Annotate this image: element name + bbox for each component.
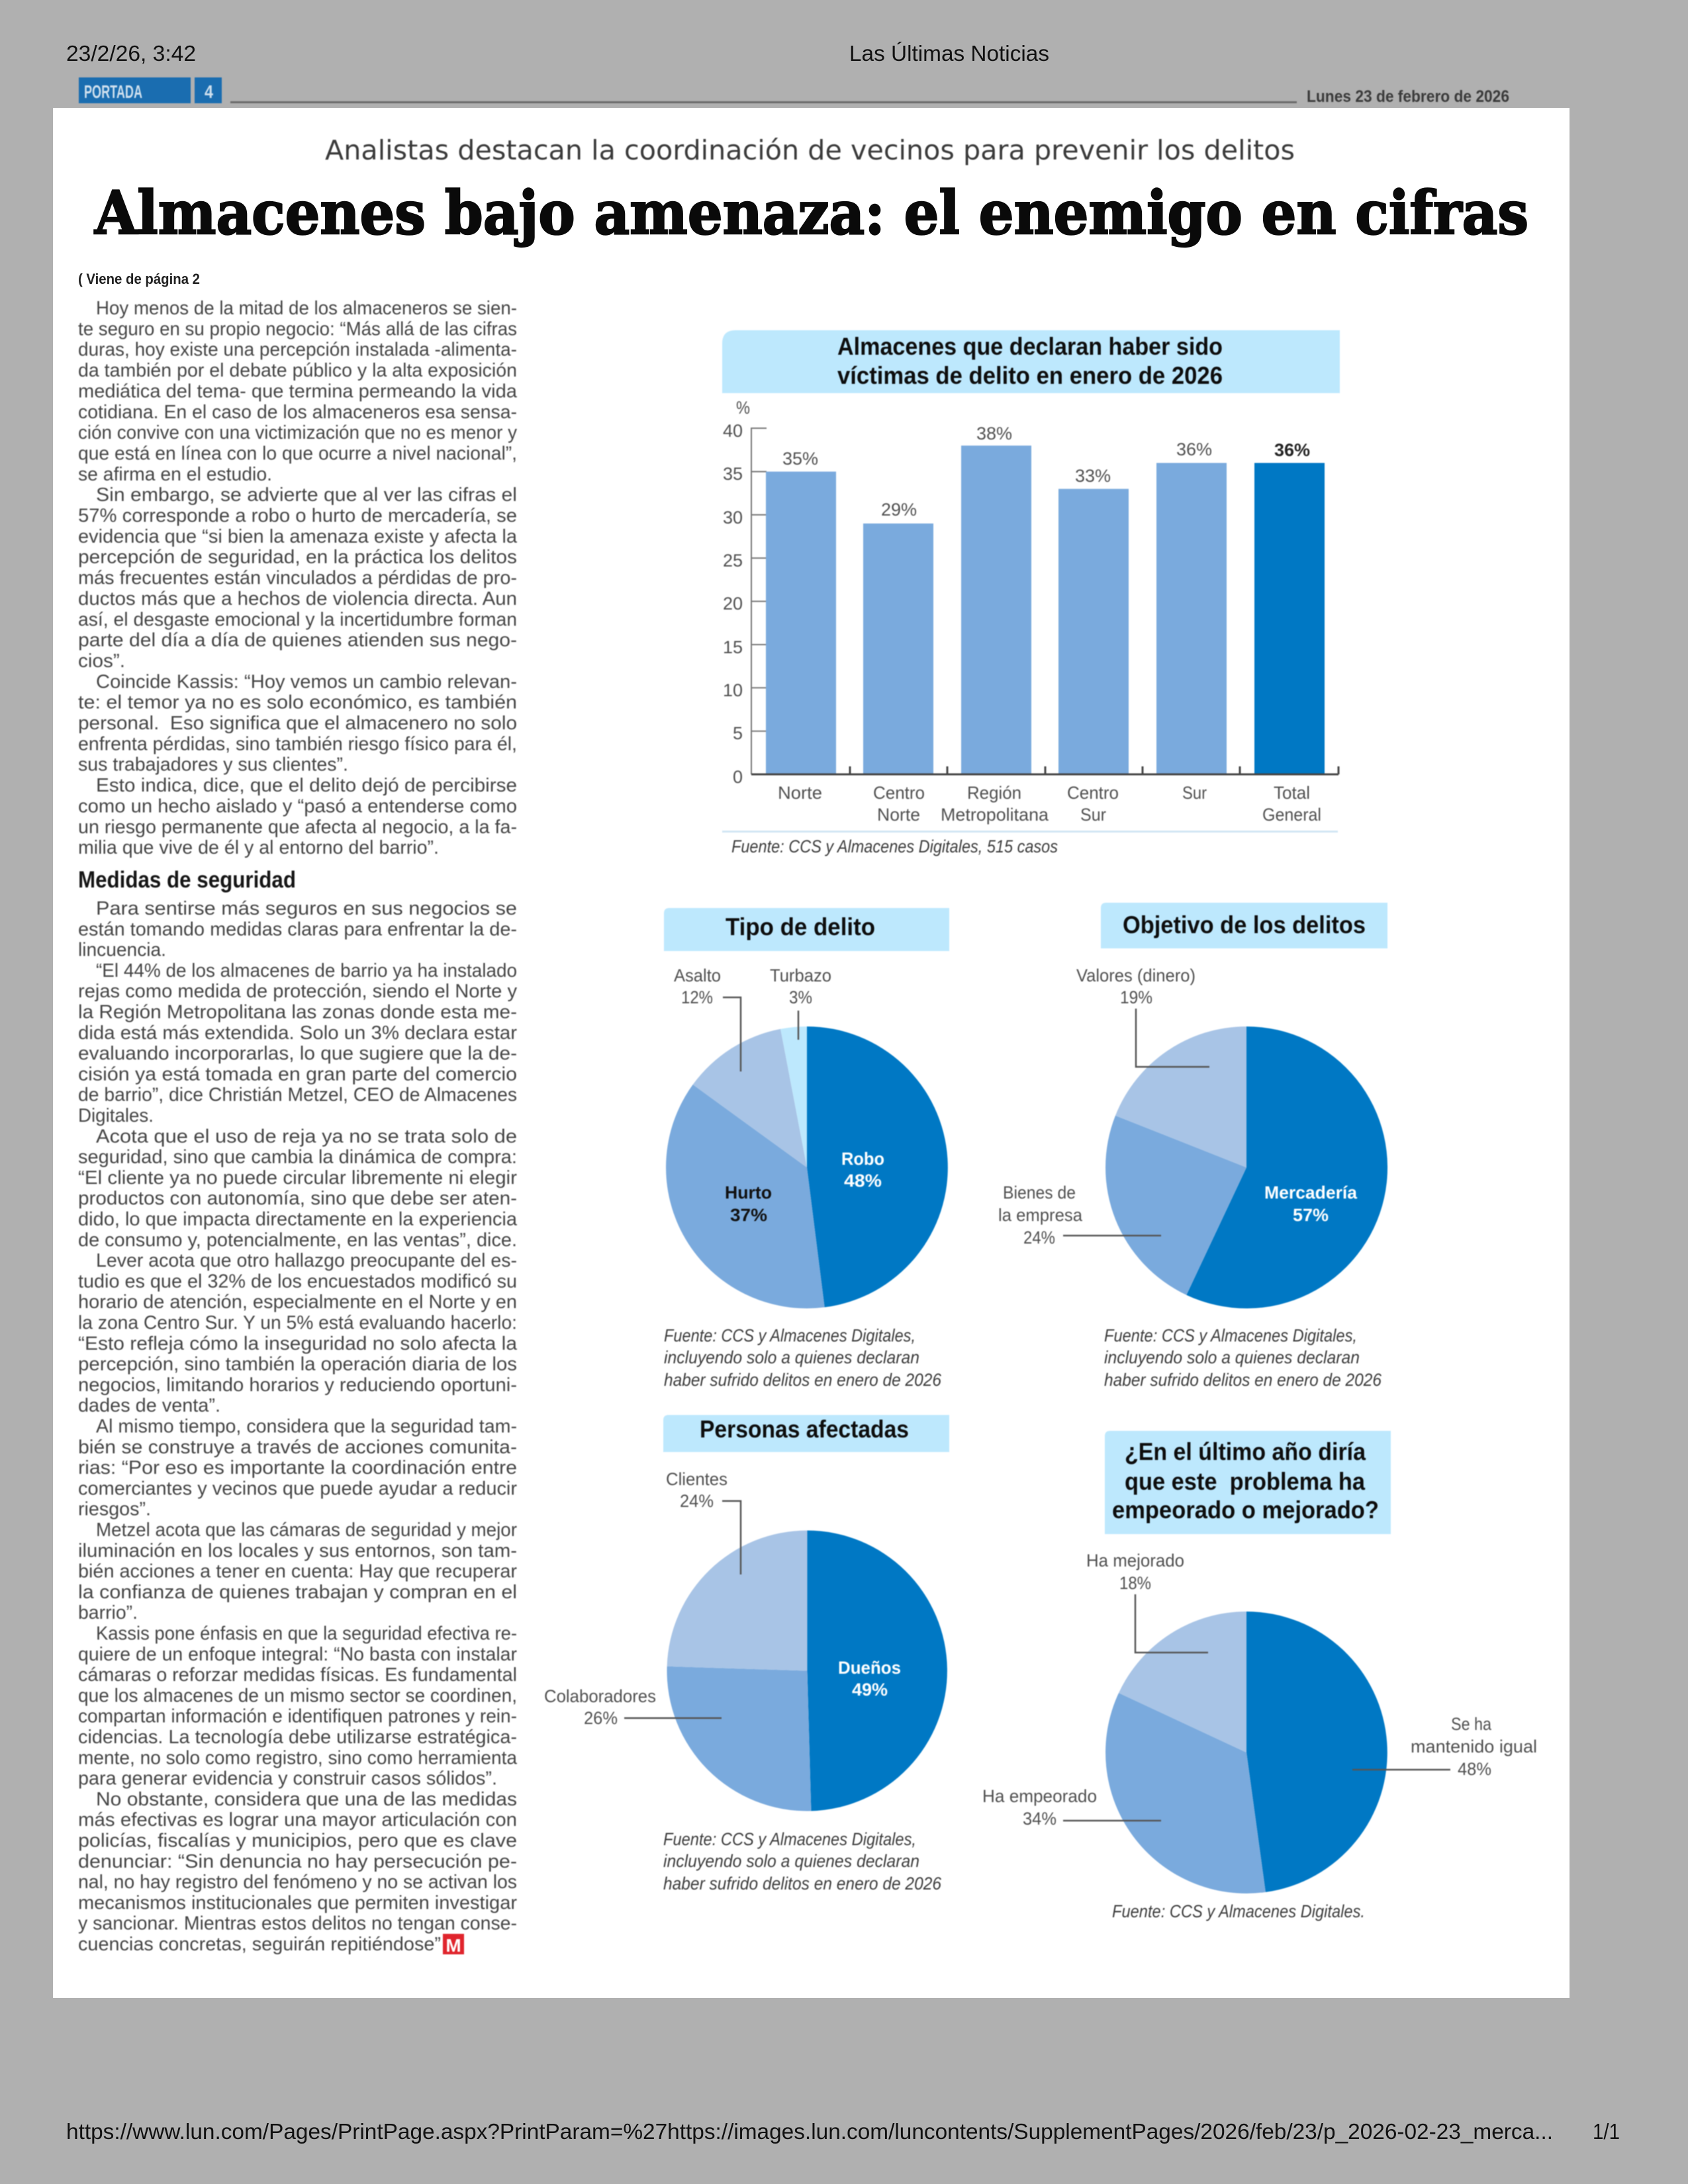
paragraph: denuncia: No obstante, considera que una de las medidas bbox=[96, 1789, 517, 1810]
label: valores: 19% bbox=[1120, 987, 1152, 1007]
bar value labels: 38% bbox=[976, 424, 1012, 443]
source note: Fuente: CCS y Almacenes Digitales, bbox=[663, 1829, 916, 1849]
paragraph: denuncia bbox=[78, 1789, 518, 1955]
category labels: Centro bbox=[1067, 783, 1119, 803]
source note: incluyendo solo a quienes declaran bbox=[1104, 1347, 1360, 1367]
y axis with labels: 0 bbox=[733, 767, 743, 787]
paragraph: rejas bbox=[78, 960, 518, 1126]
paragraph: sin embargo: más frecuentes están vinculados a pérdidas de pro- bbox=[78, 568, 517, 589]
label: dueños: 49% bbox=[852, 1680, 888, 1700]
paragraph: denuncia: denunciar: “Sin denuncia no hay persecución pe- bbox=[78, 1851, 517, 1872]
paragraph: rejas: Digitales. bbox=[78, 1105, 154, 1126]
paragraph: rejas: la Región Metropolitana las zonas donde esta me- bbox=[78, 1002, 517, 1023]
label: hurto: 37% bbox=[730, 1205, 767, 1225]
paragraph: Kassis: personal. Eso significa que el almacenero no solo bbox=[78, 713, 517, 734]
bars bbox=[766, 445, 1325, 774]
paragraph: denuncia: más efectivas es lograr una mayor articulación con bbox=[78, 1809, 517, 1831]
paragraph: rejas: “El 44% de los almacenes de barrio ya ha instalado bbox=[96, 960, 517, 981]
continuation note: ( Viene de página 2 bbox=[78, 271, 200, 287]
label: se ha mantenido igual bbox=[1352, 1714, 1537, 1779]
paragraph: Kassis: Coincide Kassis: “Hoy vemos un cambio relevan- bbox=[96, 671, 517, 692]
source note: Fuente: CCS y Almacenes Digitales. bbox=[1112, 1901, 1365, 1921]
bar value labels: 35% bbox=[782, 449, 818, 469]
bar value labels: 36% bbox=[1274, 440, 1310, 460]
paragraph: acciones comunitarias: comerciantes y vecinos que puede ayudar a reducir bbox=[78, 1478, 518, 1499]
category labels: Región bbox=[967, 783, 1021, 803]
newspaper section strip: PORTADA bbox=[84, 81, 142, 102]
pie chart: evolución bbox=[1105, 1612, 1387, 1893]
paragraph: percepción: ción convive con una victimización que no es menor y bbox=[78, 422, 518, 443]
label: clientes: 24% bbox=[680, 1491, 714, 1511]
paragraph: esto indica: como un hecho aislado y “pasó a entenderse como bbox=[78, 796, 517, 817]
paragraph: acota: “El cliente ya no puede circular libremente ni elegir bbox=[78, 1167, 518, 1189]
paragraph: esto indica: milia que vive de él y al entorno del barrio”. bbox=[78, 837, 439, 858]
newspaper section strip: 4 bbox=[205, 81, 213, 102]
paragraph: enfoque integral: compartan información e identifiquen patrones y rein- bbox=[78, 1706, 517, 1727]
paragraph: rejas: evaluando incorporarlas, lo que sugiere que la de- bbox=[78, 1043, 517, 1064]
paragraph: percepción: cotidiana. En el caso de los almaceneros esa sensa- bbox=[78, 402, 517, 423]
paragraph: acciones comunitarias bbox=[78, 1416, 518, 1520]
newspaper section strip bbox=[79, 77, 1509, 106]
source note: incluyendo solo a quienes declaran bbox=[664, 1347, 919, 1367]
browser print header bbox=[66, 41, 1049, 66]
y axis with labels: 25 bbox=[723, 551, 743, 570]
paragraph: acciones comunitarias: Al mismo tiempo, considera que la seguridad tam- bbox=[96, 1416, 517, 1437]
category labels: Sur bbox=[1182, 783, 1207, 803]
y axis with labels: 20 bbox=[723, 594, 743, 614]
label: mercadería: Mercadería bbox=[1264, 1183, 1358, 1203]
subheading: medidas de seguridad: Medidas de seguridad bbox=[78, 867, 296, 893]
y axis with labels: 15 bbox=[723, 637, 743, 657]
paragraph: enfoque integral: cámaras o reforzar medidas físicas. Es fundamental bbox=[78, 1664, 517, 1686]
y axis with labels: 5 bbox=[733, 723, 743, 743]
paragraph: percepción bbox=[78, 298, 518, 485]
paragraph: metzel cámaras bbox=[78, 1520, 518, 1623]
heading: personas afectadas bbox=[663, 1415, 949, 1452]
paragraph: percepción: se afirma en el estudio. bbox=[78, 464, 272, 485]
paragraph: denuncia: y sancionar. Mientras estos delitos no tengan conse- bbox=[78, 1913, 517, 1934]
heading: objetivo: Objetivo de los delitos bbox=[1123, 911, 1366, 938]
paragraph: sin embargo: evidencia que “si bien la amenaza existe y afecta la bbox=[78, 526, 517, 547]
label: robo: 48% bbox=[844, 1171, 882, 1191]
label: bienes de la empresa: 24% bbox=[1023, 1228, 1055, 1248]
y axis with labels: 35 bbox=[723, 464, 743, 484]
y axis with labels: 10 bbox=[723, 680, 743, 700]
heading: bar chart: víctimas de delito en enero de 2026 bbox=[837, 362, 1223, 389]
label: dueños: Dueños bbox=[838, 1658, 901, 1678]
category labels: Centro bbox=[873, 783, 925, 803]
label: turbazo: Turbazo bbox=[770, 966, 831, 985]
paragraph: rejas: de barrio”, dice Christián Metzel, CEO de Almacenes bbox=[78, 1085, 517, 1106]
paragraph: esto indica: un riesgo permanente que afecta al negocio, a la fa- bbox=[78, 817, 517, 838]
heading: bar chart bbox=[722, 330, 1340, 393]
x axis baseline bbox=[751, 766, 1338, 774]
paragraph: denuncia: policías, fiscalías y municipios, pero que es clave bbox=[78, 1831, 517, 1852]
label: se ha mantenido igual: 48% bbox=[1458, 1759, 1491, 1779]
paragraph: acota: seguridad, sino que cambia la dinámica de compra: bbox=[78, 1147, 517, 1168]
paragraph: enfoque integral: quiere de un enfoque integral: “No basta con instalar bbox=[78, 1644, 517, 1665]
source note bbox=[1104, 1326, 1382, 1390]
label: asalto: Asalto bbox=[674, 966, 721, 985]
label: mercadería bbox=[1264, 1183, 1358, 1225]
paragraph: enfoque integral bbox=[78, 1623, 517, 1790]
paragraph: percepción: te seguro en su propio negocio: “Más allá de las cifras bbox=[78, 318, 517, 340]
paragraph: acota: dido, lo que impacta directamente en la experiencia bbox=[78, 1208, 517, 1230]
newspaper section strip: Lunes 23 de febrero de 2026 bbox=[1307, 87, 1509, 106]
category labels: Sur bbox=[1080, 805, 1106, 825]
label: se ha mantenido igual: Se ha bbox=[1451, 1714, 1492, 1734]
title: Almacenes bajo amenaza: el enemigo en cifras bbox=[94, 178, 1528, 248]
paragraph: sin embargo: así, el desgaste emocional y la incertidumbre forman bbox=[78, 609, 517, 630]
source note: Fuente: CCS y Almacenes Digitales, bbox=[1104, 1326, 1357, 1345]
paragraph: para sentirse: están tomando medidas claras para enfrentar la de- bbox=[78, 919, 517, 940]
paragraph: acota: productos con autonomía, sino que debe ser aten- bbox=[78, 1188, 517, 1209]
paragraph: para sentirse bbox=[78, 898, 517, 961]
source note: incluyendo solo a quienes declaran bbox=[663, 1851, 919, 1871]
paragraph: metzel cámaras: bién acciones a tener en cuenta: Hay que recuperar bbox=[78, 1561, 518, 1582]
paragraph: Kassis: enfrenta pérdidas, sino también riesgo físico para él, bbox=[78, 733, 517, 754]
label: turbazo: 3% bbox=[789, 987, 812, 1007]
browser print header: Las Últimas Noticias bbox=[849, 41, 1049, 66]
article text column bbox=[78, 298, 518, 1956]
paragraph: enfoque integral: Kassis pone énfasis en que la seguridad efectiva re- bbox=[96, 1623, 517, 1644]
source note: Fuente: CCS y Almacenes Digitales, 515 casos bbox=[731, 837, 1058, 856]
paragraph: acota: Acota que el uso de reja ya no se trata solo de bbox=[96, 1126, 517, 1147]
label: bienes de la empresa bbox=[998, 1183, 1161, 1248]
source note: Fuente: CCS y Almacenes Digitales, bbox=[664, 1326, 915, 1345]
paragraph: lever: percepción, sino también la operación diaria de los bbox=[78, 1354, 517, 1375]
label: clientes: Clientes bbox=[666, 1469, 727, 1489]
label: robo: Robo bbox=[841, 1149, 884, 1169]
paragraph: rejas: rejas como medida de protección, siendo el Norte y bbox=[78, 981, 518, 1002]
label: ha empeorado: Ha empeorado bbox=[982, 1786, 1097, 1806]
panel: objetivo de los delitos bbox=[998, 903, 1387, 1390]
paragraph: sin embargo bbox=[78, 484, 517, 672]
label: asalto bbox=[674, 966, 741, 1071]
panel: empeorado o mejorado bbox=[982, 1431, 1537, 1921]
paragraph: Kassis: te: el temor ya no es solo económico, es también bbox=[78, 692, 517, 713]
paragraph: para sentirse: lincuencia. bbox=[78, 940, 166, 961]
label: ha empeorado bbox=[982, 1786, 1161, 1829]
paragraph: percepción: da también por el debate público y la alta exposición bbox=[78, 360, 517, 381]
pie chart: tipo de delito bbox=[666, 1026, 948, 1308]
paragraph: lever: “Esto refleja cómo la inseguridad no solo afecta la bbox=[78, 1333, 517, 1354]
source note: haber sufrido delitos en enero de 2026 bbox=[1104, 1370, 1382, 1390]
label: hurto: Hurto bbox=[725, 1183, 772, 1203]
label: clientes bbox=[666, 1469, 741, 1574]
paragraph: enfoque integral: para generar evidencia y construir casos sólidos”. bbox=[78, 1768, 497, 1790]
label: hurto bbox=[725, 1183, 772, 1225]
label: bienes de la empresa: Bienes de bbox=[1003, 1183, 1076, 1203]
label: colaboradores: 26% bbox=[584, 1708, 618, 1728]
label: ha mejorado: Ha mejorado bbox=[1086, 1551, 1184, 1570]
label: valores: Valores (dinero) bbox=[1076, 966, 1196, 985]
heading: tipo de delito bbox=[664, 908, 949, 951]
category labels: Metropolitana bbox=[941, 805, 1049, 825]
pie chart: personas afectadas bbox=[667, 1530, 947, 1811]
paragraph: rejas: dida está más extendida. Solo un 3% declara estar bbox=[78, 1023, 518, 1044]
panel: tipo de delito bbox=[664, 908, 949, 1390]
category labels: Norte bbox=[778, 783, 822, 803]
paragraph: metzel cámaras: la confianza de quienes trabajan y compran en el bbox=[78, 1582, 517, 1603]
label: turbazo bbox=[770, 966, 831, 1040]
paragraph: Kassis: sus trabajadores y sus clientes”. bbox=[78, 754, 348, 776]
bar value labels: 29% bbox=[881, 500, 917, 520]
heading: bar chart: Almacenes que declaran haber sido bbox=[837, 333, 1223, 360]
browser print header: 23/2/26, 3:42 bbox=[66, 42, 196, 66]
category labels: Total bbox=[1274, 783, 1310, 803]
heading: pregunta: que este problema ha bbox=[1125, 1468, 1365, 1495]
paragraph: Kassis bbox=[78, 671, 517, 776]
paragraph: acota bbox=[78, 1126, 518, 1251]
subtitle: Analistas destacan la coordinación de vecinos para prevenir los delitos bbox=[325, 134, 1295, 166]
label: robo bbox=[841, 1149, 884, 1191]
paragraph: lever: negocios, limitando horarios y reduciendo oportuni- bbox=[78, 1375, 517, 1396]
paragraph: sin embargo: cios”. bbox=[78, 651, 125, 672]
paragraph: percepción: que está en línea con lo que ocurre a nivel nacional”, bbox=[78, 443, 517, 465]
label: dueños bbox=[838, 1658, 901, 1700]
heading: personas afectadas: Personas afectadas bbox=[700, 1416, 909, 1443]
panel: bar chart victims bbox=[722, 330, 1340, 856]
paragraph: acota: de consumo y, potencialmente, en las ventas”, dice. bbox=[78, 1230, 517, 1251]
bar value labels: 36% bbox=[1176, 439, 1212, 459]
category labels: General bbox=[1262, 805, 1321, 825]
paragraph: acciones comunitarias: bién se construye a través de acciones comunita- bbox=[78, 1437, 517, 1458]
paragraph: para sentirse: Para sentirse más seguros en sus negocios se bbox=[96, 898, 517, 919]
paragraph: percepción: mediática del tema- que termina permeando la vida bbox=[78, 381, 517, 402]
icon: red end mark bbox=[443, 1934, 464, 1956]
label: colaboradores bbox=[544, 1686, 722, 1728]
paragraph: metzel cámaras: Metzel acota que las cámaras de seguridad y mejor bbox=[96, 1520, 517, 1541]
paragraph: percepción: Hoy menos de la mitad de los almaceneros se sien- bbox=[96, 298, 517, 319]
paragraph: percepción: duras, hoy existe una percepción instalada -alimenta- bbox=[78, 340, 517, 361]
paragraph: lever: horario de atención, especialmente en el Norte y en bbox=[78, 1292, 517, 1313]
paragraph: lever: Lever acota que otro hallazgo preocupante del es- bbox=[96, 1250, 517, 1271]
source note bbox=[663, 1829, 942, 1893]
paragraph: rejas: cisión ya está tomada en gran parte del comercio bbox=[78, 1064, 517, 1085]
heading: tipo de delito: Tipo de delito bbox=[726, 913, 875, 940]
paragraph: lever: la zona Centro Sur. Y un 5% está evaluando hacerlo: bbox=[78, 1312, 517, 1334]
paragraph: enfoque integral: que los almacenes de un mismo sector se coordinen, bbox=[78, 1685, 517, 1706]
paragraph: sin embargo: percepción de seguridad, en la práctica los delitos bbox=[78, 547, 517, 568]
paragraph: sin embargo: ductos más que a hechos de violencia directa. Aun bbox=[78, 588, 517, 610]
label: se ha mantenido igual: mantenido igual bbox=[1411, 1737, 1537, 1756]
category labels bbox=[778, 783, 1321, 825]
paragraph: denuncia: mecanismos institucionales que permiten investigar bbox=[78, 1892, 518, 1913]
panel: personas afectadas bbox=[544, 1415, 949, 1893]
y axis with labels: 30 bbox=[723, 508, 743, 527]
paragraph: lever: dades de venta”. bbox=[78, 1395, 220, 1416]
paragraph: esto indica: Esto indica, dice, que el delito dejó de percibirse bbox=[96, 775, 517, 796]
heading: pregunta: ¿En el último año diría bbox=[1125, 1438, 1366, 1465]
paragraph: acciones comunitarias: rias: “Por eso es importante la coordinación entre bbox=[78, 1457, 517, 1479]
paragraph: esto indica bbox=[78, 775, 517, 858]
label: colaboradores: Colaboradores bbox=[544, 1686, 656, 1706]
source note: haber sufrido delitos en enero de 2026 bbox=[663, 1874, 942, 1893]
label: ha empeorado: 34% bbox=[1023, 1809, 1056, 1829]
pie chart: objetivo bbox=[1105, 1026, 1387, 1308]
y axis with labels: % bbox=[736, 398, 750, 418]
paragraph: lever bbox=[78, 1250, 517, 1416]
source note: haber sufrido delitos en enero de 2026 bbox=[664, 1370, 942, 1390]
y axis with labels: 40 bbox=[723, 421, 743, 441]
label: valores bbox=[1076, 966, 1209, 1067]
paragraph: denuncia: cuencias concretas, seguirán repitiéndose” bbox=[78, 1934, 441, 1955]
paragraph: sin embargo: 57% corresponde a robo o hurto de mercadería, se bbox=[78, 506, 517, 527]
bar value labels: 33% bbox=[1075, 466, 1111, 486]
source note bbox=[664, 1326, 942, 1390]
browser print footer: 1/1 bbox=[1593, 2120, 1620, 2144]
label: asalto: 12% bbox=[681, 987, 713, 1007]
paragraph: metzel cámaras: barrio”. bbox=[78, 1602, 138, 1623]
heading: pregunta bbox=[1105, 1431, 1391, 1534]
paragraph: sin embargo: parte del día a día de quienes atienden sus nego- bbox=[78, 630, 517, 651]
paragraph: enfoque integral: mente, no solo como registro, sino como herramienta bbox=[78, 1747, 517, 1768]
heading: objetivo bbox=[1101, 903, 1387, 948]
panel: newspaper page bbox=[53, 108, 1570, 1998]
y axis with labels bbox=[723, 398, 767, 787]
label: ha mejorado bbox=[1086, 1551, 1208, 1653]
paragraph: denuncia: nal, no hay registro del fenómeno y no se activan los bbox=[78, 1872, 517, 1893]
paragraph: enfoque integral: cidencias. La tecnología debe utilizarse estratégica- bbox=[78, 1727, 517, 1748]
paragraph: acciones comunitarias: riesgos”. bbox=[78, 1499, 151, 1520]
icon: red end mark: M bbox=[445, 1935, 461, 1956]
paragraph: metzel cámaras: iluminación en los locales y sus entornos, son tam- bbox=[78, 1540, 517, 1561]
label: ha mejorado: 18% bbox=[1119, 1573, 1151, 1593]
heading: pregunta: empeorado o mejorado? bbox=[1112, 1496, 1379, 1524]
label: mercadería: 57% bbox=[1293, 1205, 1329, 1225]
bar value labels bbox=[782, 424, 1310, 520]
paragraph: lever: tudio es que el 32% de los encuestados modificó su bbox=[78, 1271, 517, 1292]
category labels: Norte bbox=[877, 805, 920, 825]
paragraph: sin embargo: Sin embargo, se advierte que al ver las cifras el bbox=[96, 484, 517, 506]
browser print footer: https://www.lun.com/Pages/PrintPage.aspx?PrintParam=%27https://images.lun.com/luncontents/SupplementPages/2026/feb/23/p_2026-02-23_merca... bbox=[66, 2120, 1553, 2144]
label: bienes de la empresa: la empresa bbox=[998, 1205, 1083, 1225]
